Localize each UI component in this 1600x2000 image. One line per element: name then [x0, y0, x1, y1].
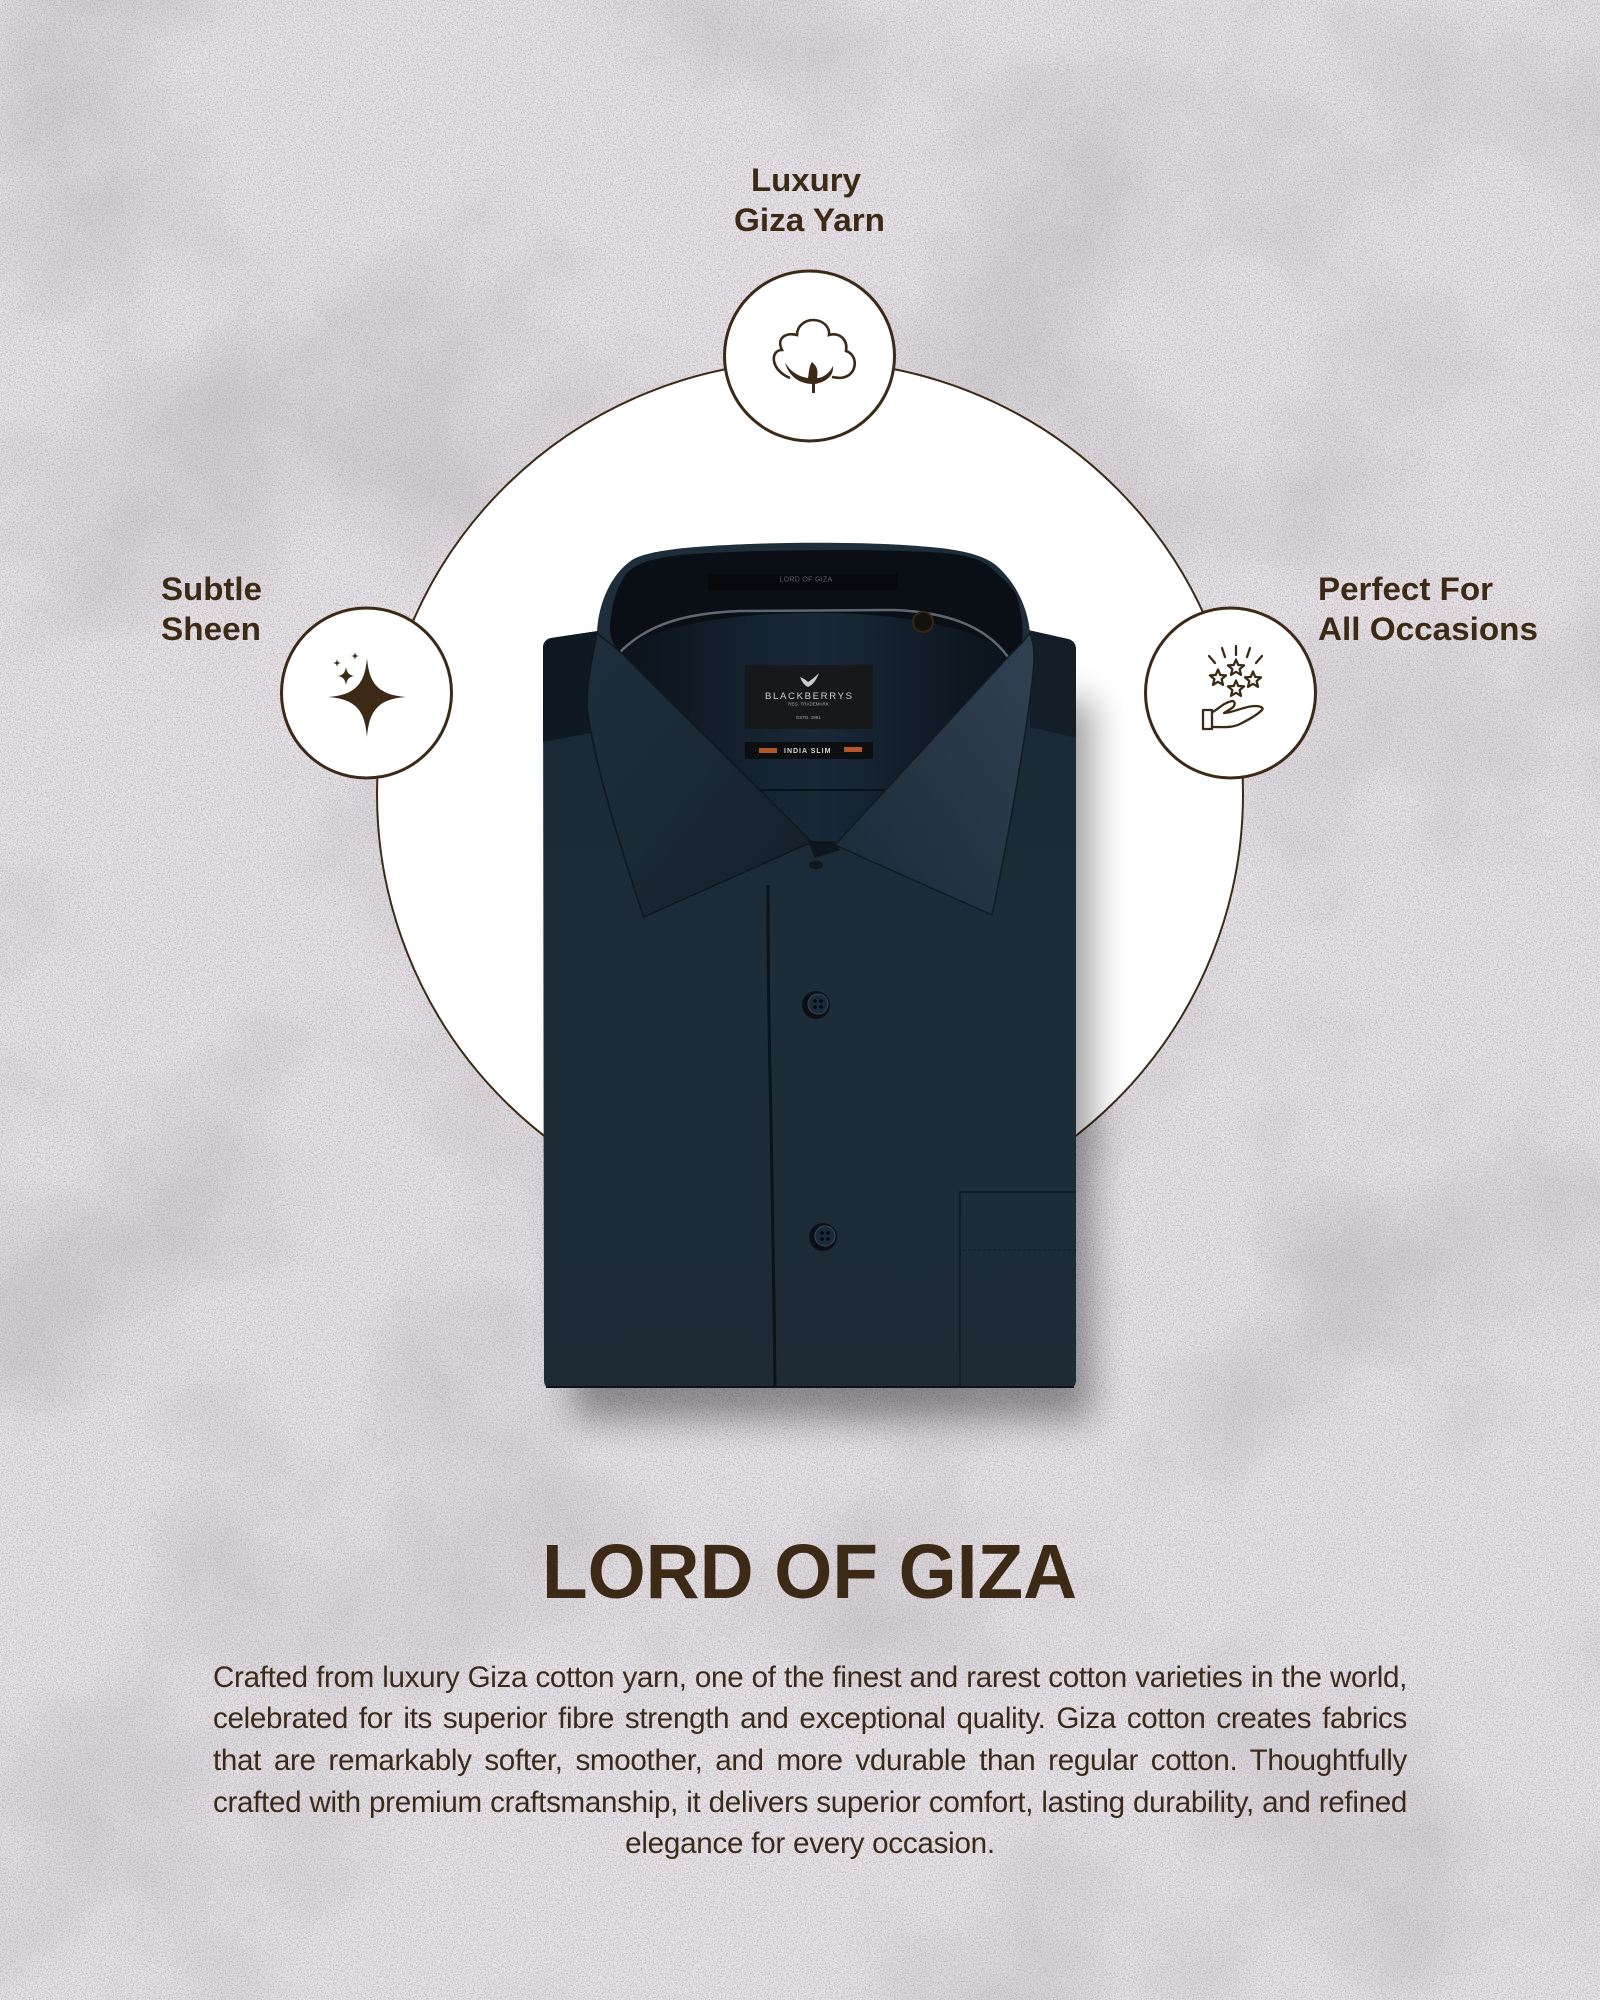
- collar piping: [620, 610, 1008, 657]
- shirt shadow: [570, 700, 1092, 1420]
- shoulder panels: [543, 630, 1076, 742]
- label: subtle sheen: Subtle: [161, 571, 262, 607]
- label: perfect for all occasions: Perfect For: [1318, 571, 1493, 607]
- collar stand inner: [610, 550, 1023, 657]
- description paragraph: Crafted from luxury Giza cotton yarn, one of the finest and rarest cotton varieties in the world,: [213, 1660, 1407, 1694]
- icon: hand with stars: [1203, 646, 1263, 729]
- brand label: ESTD. 1991: [796, 715, 821, 720]
- pocket: [960, 1192, 1076, 1388]
- shirt bottom edge: [546, 1386, 1074, 1388]
- collar stand rim: [597, 543, 1034, 662]
- label: luxury giza yarn: Luxury: [751, 162, 861, 198]
- collar left leaf: [587, 633, 812, 917]
- label: perfect for all occasions: All Occasions: [1318, 611, 1538, 647]
- brand label: BLACKBERRYS: [765, 691, 852, 702]
- shirt body: [543, 630, 1076, 1388]
- icon: cotton boll: [774, 320, 855, 393]
- shirt buttons: [802, 861, 837, 1251]
- description paragraph: [213, 1660, 1408, 1860]
- collar text patch: [708, 574, 898, 590]
- collar right leaf: [835, 633, 1034, 915]
- description paragraph: crafted with premium craftsmanship, it delivers superior comfort, lasting durability, and refined: [213, 1786, 1407, 1819]
- description paragraph: celebrated for its superior fibre strength and exceptional quality. Giza cotton creates fabrics: [213, 1702, 1407, 1735]
- collar snap: [913, 612, 933, 632]
- placket fold line: [768, 885, 775, 1388]
- brand label: [745, 665, 873, 729]
- fit label: INDIA SLIM: [784, 748, 831, 755]
- collar knot: [808, 841, 840, 858]
- collar text patch: LORD OF GIZA: [780, 576, 833, 584]
- label: subtle sheen: Sheen: [161, 611, 261, 647]
- title: LORD OF GIZA: [542, 1529, 1077, 1615]
- brand label: REG. TRADEMARK: [788, 702, 829, 706]
- icon: sparkles: [328, 652, 406, 737]
- fit label: [745, 742, 873, 759]
- description paragraph: that are remarkably softer, smoother, and more vdurable than regular cotton. Thoughtfully: [213, 1744, 1407, 1777]
- description paragraph: elegance for every occasion.: [625, 1827, 995, 1860]
- neck interior: [620, 613, 1008, 845]
- yoke seam: [754, 789, 888, 791]
- label: luxury giza yarn: Giza Yarn: [734, 202, 885, 238]
